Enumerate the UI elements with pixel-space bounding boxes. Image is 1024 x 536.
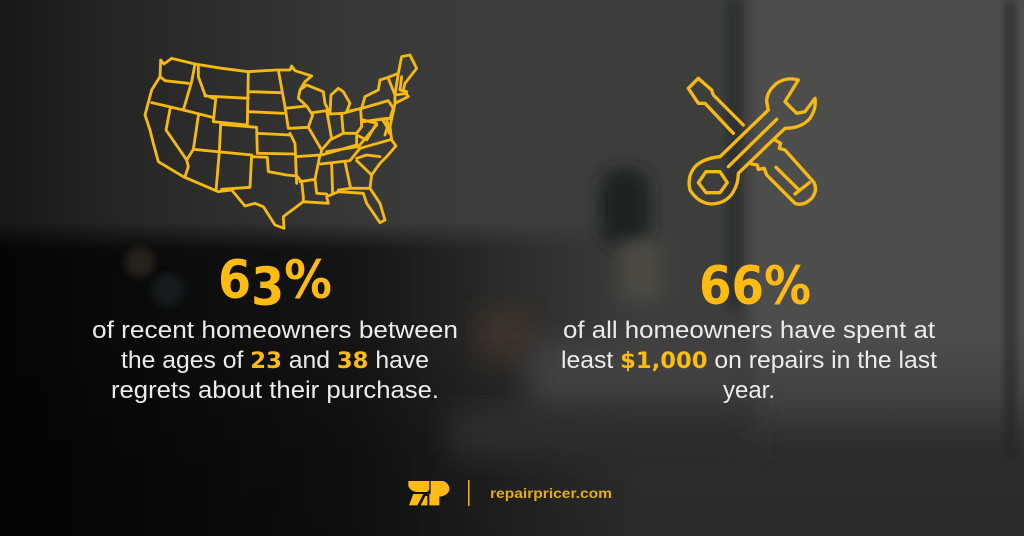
icon: USA map outline [145, 55, 417, 228]
divider [468, 480, 470, 506]
logo: RP mark [408, 481, 449, 505]
stat: 66%: 66% [699, 256, 811, 317]
text block: recent homeowners: regrets about their purchase. [111, 377, 439, 404]
stat: 63%: 6 [218, 250, 255, 311]
stat: 63%: % [284, 250, 332, 311]
website url: repairpricer.com [490, 485, 612, 501]
text block: recent homeowners: the ages of 23 and 38 have [121, 347, 429, 374]
stat: 63%: 3 [251, 257, 284, 318]
text block: recent homeowners: of recent homeowners between [92, 317, 458, 344]
text block: repairs spend: year. [723, 377, 775, 404]
text block: repairs spend [561, 317, 937, 404]
icon: crossed wrench and screwdriver [688, 78, 815, 204]
text block: repairs spend: of all homeowners have spent at [563, 317, 935, 344]
text block: repairs spend: least $1,000 on repairs in the last [561, 347, 937, 374]
text block: recent homeowners [92, 317, 458, 404]
